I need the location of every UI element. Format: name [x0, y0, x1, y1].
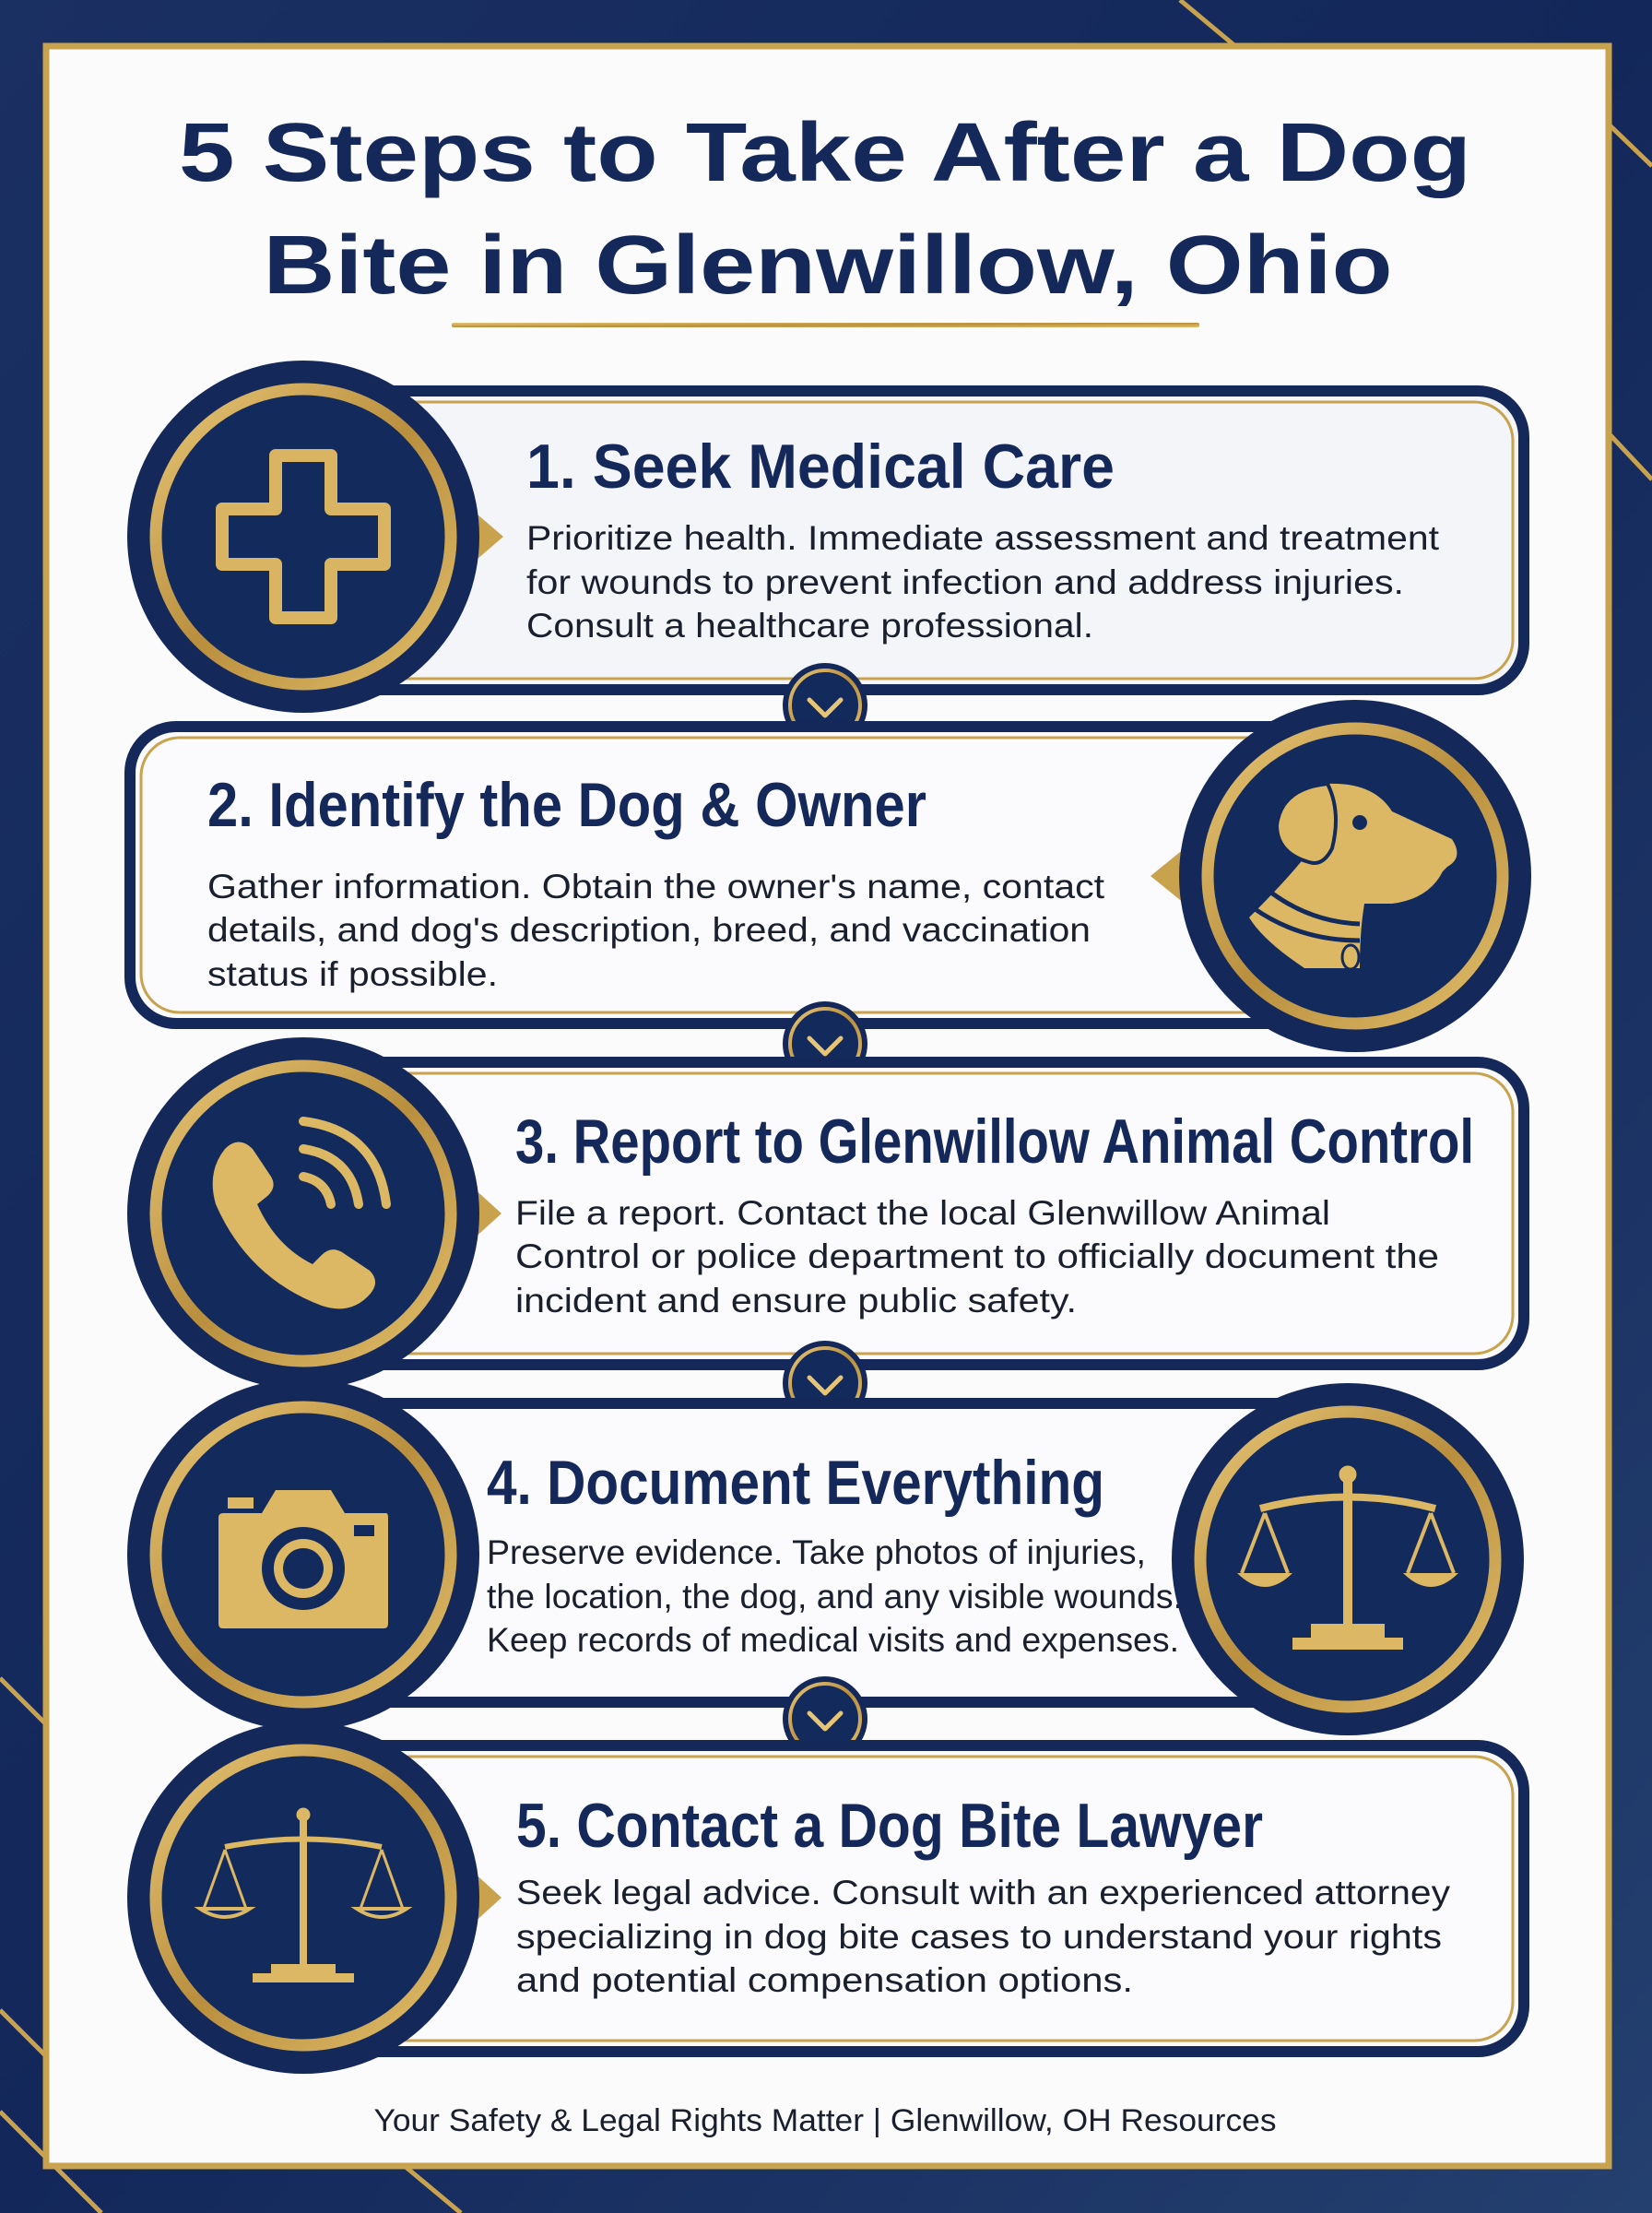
card 4: Document Everything: the location, the dog, and any visible wounds. — [487, 1578, 1183, 1615]
card 2: Identify the Dog & Owner: 2. Identify the Dog & Owner — [207, 770, 926, 840]
icon: medical cross — [127, 361, 503, 713]
card 5: Contact a Lawyer: 5. Contact a Dog Bite Lawyer — [516, 1791, 1263, 1861]
icon: scales of justice — [127, 1722, 502, 2074]
card 1: Seek Medical Care: 1. Seek Medical Care — [526, 432, 1115, 502]
footer: Your Safety & Legal Rights Matter | Glenwillow, OH Resources — [374, 2103, 1276, 2138]
icon: scales right — [1172, 1383, 1524, 1735]
card 5: Contact a Lawyer: Seek legal advice. Consult with an experienced attorney — [516, 1874, 1451, 1911]
card 3: Report to Animal Control: File a report. Contact the local Glenwillow Animal — [515, 1194, 1330, 1232]
card 3: Report to Animal Control: 3. Report to Glenwillow Animal Control — [515, 1106, 1474, 1177]
card 5: Contact a Lawyer: specializing in dog bite cases to understand your rights — [516, 1918, 1442, 1956]
card 2: Identify the Dog & Owner: Gather information. Obtain the owner's name, contact — [207, 868, 1105, 905]
card 1: Seek Medical Care: Consult a healthcare professional. — [526, 607, 1093, 645]
chevron 3 — [783, 1341, 867, 1426]
card 1: Seek Medical Care — [304, 391, 1524, 690]
title — [179, 107, 1471, 312]
card 5: Contact a Lawyer — [304, 1746, 1524, 2052]
card 4: Document Everything: Preserve evidence. Take photos of injuries, — [487, 1533, 1146, 1571]
card 2: Identify the Dog & Owner — [130, 727, 1347, 1024]
icon: camera — [127, 1379, 479, 1731]
card 1: Seek Medical Care: Prioritize health. Immediate assessment and treatment — [526, 519, 1440, 557]
chevron 1 — [783, 663, 867, 748]
card 3: Report to Animal Control: Control or police department to officially document the — [515, 1237, 1439, 1275]
title underline — [452, 323, 1199, 327]
chevron 2 — [783, 1001, 867, 1086]
chevron 4 — [783, 1676, 867, 1761]
title: 5 Steps to Take After a Dog — [179, 107, 1471, 199]
icon: dog — [1150, 700, 1531, 1052]
card 1: Seek Medical Care: for wounds to prevent infection and address injuries. — [526, 563, 1404, 601]
card 3: Report to Animal Control: incident and ensure public safety. — [515, 1282, 1077, 1320]
card 4: Document Everything: 4. Document Everything — [487, 1448, 1104, 1518]
card 2: Identify the Dog & Owner: details, and dog's description, breed, and vaccination — [207, 911, 1091, 949]
card 2: Identify the Dog & Owner: status if possible. — [207, 955, 498, 993]
card 5: Contact a Lawyer: and potential compensation options. — [516, 1961, 1133, 1999]
card 3: Report to Animal Control — [304, 1062, 1524, 1365]
card 4: Document Everything — [304, 1403, 1346, 1702]
icon: phone — [127, 1037, 502, 1390]
card 4: Document Everything: Keep records of medical visits and expenses. — [487, 1621, 1179, 1659]
title: Bite in Glenwillow, Ohio — [264, 219, 1392, 312]
